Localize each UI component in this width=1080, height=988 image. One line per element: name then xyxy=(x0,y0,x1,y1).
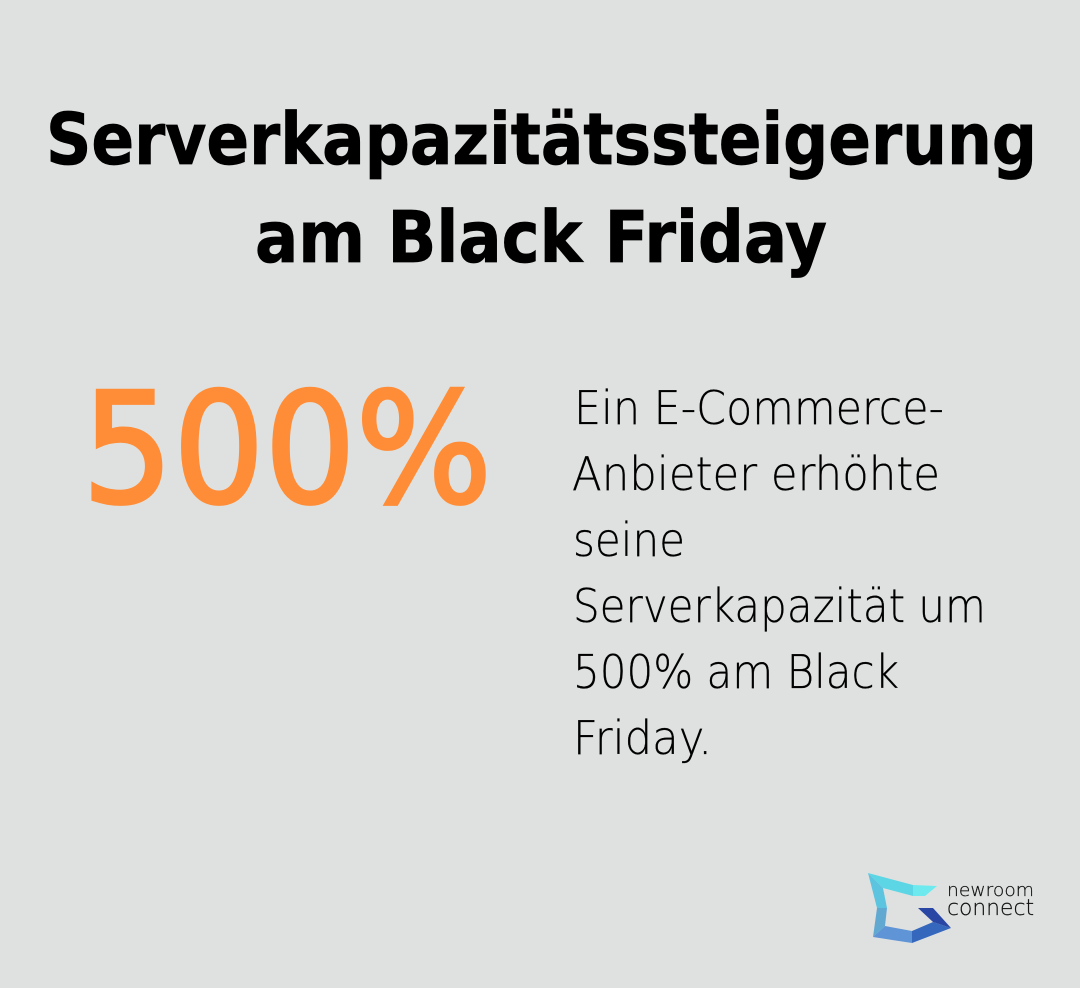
description text: Friday. xyxy=(573,711,712,765)
logo: newroom connect xyxy=(868,873,1034,943)
title: am Black Friday xyxy=(255,196,827,279)
logo wordmark: newroom xyxy=(947,880,1034,901)
description text: 500% am Black xyxy=(573,645,899,699)
description text xyxy=(572,381,986,765)
logo mark xyxy=(868,873,951,943)
description text: Serverkapazität um xyxy=(573,579,986,633)
description text: Ein E-Commerce- xyxy=(574,381,944,435)
logo wordmark: connect xyxy=(947,896,1034,921)
description text: seine xyxy=(573,513,685,567)
title xyxy=(46,98,1037,279)
description text: Anbieter erhöhte xyxy=(572,447,940,501)
big statistic: 500%: 500% xyxy=(82,361,492,539)
logo wordmark xyxy=(947,880,1034,921)
